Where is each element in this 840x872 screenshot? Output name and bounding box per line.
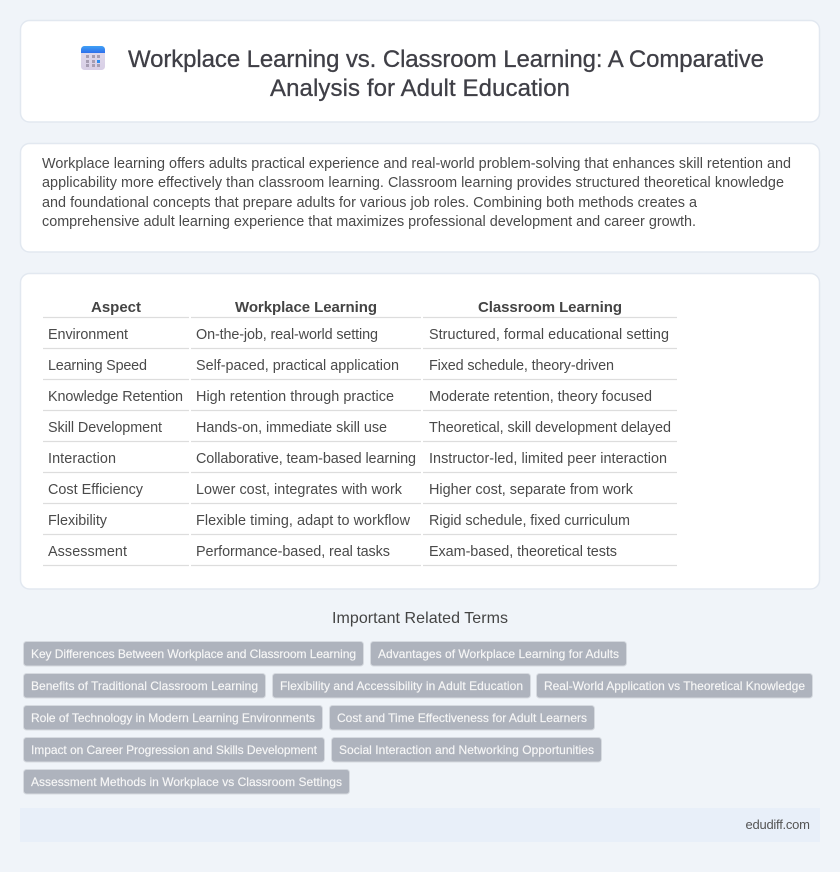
row: Knowledge Retention	[43, 389, 677, 410]
row: Cost Efficiency: Lower cost, integrates with work	[196, 482, 403, 498]
row: Cost Efficiency	[43, 482, 677, 504]
icon: calendar	[81, 46, 105, 70]
row: Learning Speed: Learning Speed	[48, 358, 147, 374]
row: Environment	[43, 327, 677, 348]
text block: introduction: and foundational concepts that prepare adults for various job roles. Combining both methods creates a	[42, 195, 697, 211]
panel: comparison table	[20, 274, 820, 589]
text block: introduction: Workplace learning offers adults practical experience and real-world problem-solving that enhances skill retention and	[42, 156, 791, 172]
title: Analysis for Adult Education	[270, 75, 570, 102]
table header row: Aspect	[91, 299, 141, 316]
table header row: Workplace Learning	[235, 299, 377, 316]
panel: introduction paragraph	[20, 144, 820, 252]
row: Flexibility: Flexible timing, adapt to workflow	[196, 513, 411, 529]
row: Cost Efficiency: Higher cost, separate from work	[429, 482, 634, 498]
row: Interaction: Instructor-led, limited peer interaction	[429, 451, 667, 467]
row: Environment: On-the-job, real-world setting	[196, 327, 378, 343]
row: Interaction	[43, 451, 677, 472]
tag: Social Interaction and Networking Opportunities	[339, 743, 594, 757]
tag	[24, 770, 350, 794]
text block: introduction	[42, 156, 791, 230]
row: Assessment: Assessment	[48, 544, 127, 560]
footer: edudiff.com	[746, 817, 810, 832]
row: Knowledge Retention: Knowledge Retention	[48, 389, 183, 405]
tag	[24, 674, 266, 698]
tag	[24, 706, 322, 730]
row: Environment: Environment	[48, 327, 128, 343]
text block: introduction: applicability more effectively than classroom learning. Classroom learning provides structured theoretical knowledge	[42, 175, 784, 191]
tag: Role of Technology in Modern Learning Environments	[31, 711, 315, 725]
tag	[536, 674, 812, 698]
row: Interaction: Interaction	[48, 451, 116, 467]
row: Environment: Structured, formal educational setting	[429, 327, 669, 343]
tag: Cost and Time Effectiveness for Adult Learners	[337, 711, 587, 725]
row: Assessment: Performance-based, real tasks	[196, 544, 390, 560]
tag	[330, 706, 594, 730]
row: Knowledge Retention: High retention through practice	[196, 389, 394, 405]
title: Workplace Learning vs. Classroom Learning: A Comparative	[128, 46, 764, 73]
tag	[370, 642, 626, 666]
row: Learning Speed: Fixed schedule, theory-driven	[429, 358, 614, 374]
row: Skill Development: Hands-on, immediate skill use	[196, 420, 387, 436]
tag	[24, 642, 364, 666]
tag: Flexibility and Accessibility in Adult Education	[280, 679, 523, 693]
row: Knowledge Retention: Moderate retention, theory focused	[429, 389, 652, 405]
heading: related terms: Important Related Terms	[332, 610, 508, 627]
tag	[272, 674, 530, 698]
tag	[24, 738, 324, 762]
row: Learning Speed: Self-paced, practical application	[196, 358, 399, 374]
row: Cost Efficiency: Cost Efficiency	[48, 482, 144, 498]
tag: Advantages of Workplace Learning for Adults	[378, 647, 619, 661]
text block: introduction: comprehensive adult learning experience that maximizes professional development and career growth.	[42, 214, 696, 230]
row: Skill Development: Theoretical, skill development delayed	[429, 420, 671, 436]
row: Interaction: Collaborative, team-based learning	[196, 451, 416, 467]
row: Learning Speed	[43, 358, 677, 380]
row: Skill Development: Skill Development	[48, 420, 162, 436]
row: Flexibility: Rigid schedule, fixed curriculum	[429, 513, 630, 529]
panel: header	[20, 20, 820, 122]
panel: related term tags	[24, 642, 812, 794]
tag: Real-World Application vs Theoretical Knowledge	[544, 679, 805, 693]
table header row: Classroom Learning	[478, 299, 622, 316]
table header row	[43, 299, 677, 318]
tag: Impact on Career Progression and Skills Development	[31, 743, 318, 757]
footer	[20, 808, 820, 842]
tag: Key Differences Between Workplace and Classroom Learning	[31, 647, 356, 661]
title	[128, 46, 764, 102]
row: Assessment: Exam-based, theoretical tests	[429, 544, 617, 560]
tag: Benefits of Traditional Classroom Learning	[31, 679, 258, 693]
row: Flexibility	[43, 513, 677, 534]
row: Flexibility: Flexibility	[48, 513, 108, 529]
row: Skill Development	[43, 420, 677, 442]
tag	[332, 738, 602, 762]
row: Assessment	[43, 544, 677, 566]
tag: Assessment Methods in Workplace vs Classroom Settings	[31, 775, 342, 789]
